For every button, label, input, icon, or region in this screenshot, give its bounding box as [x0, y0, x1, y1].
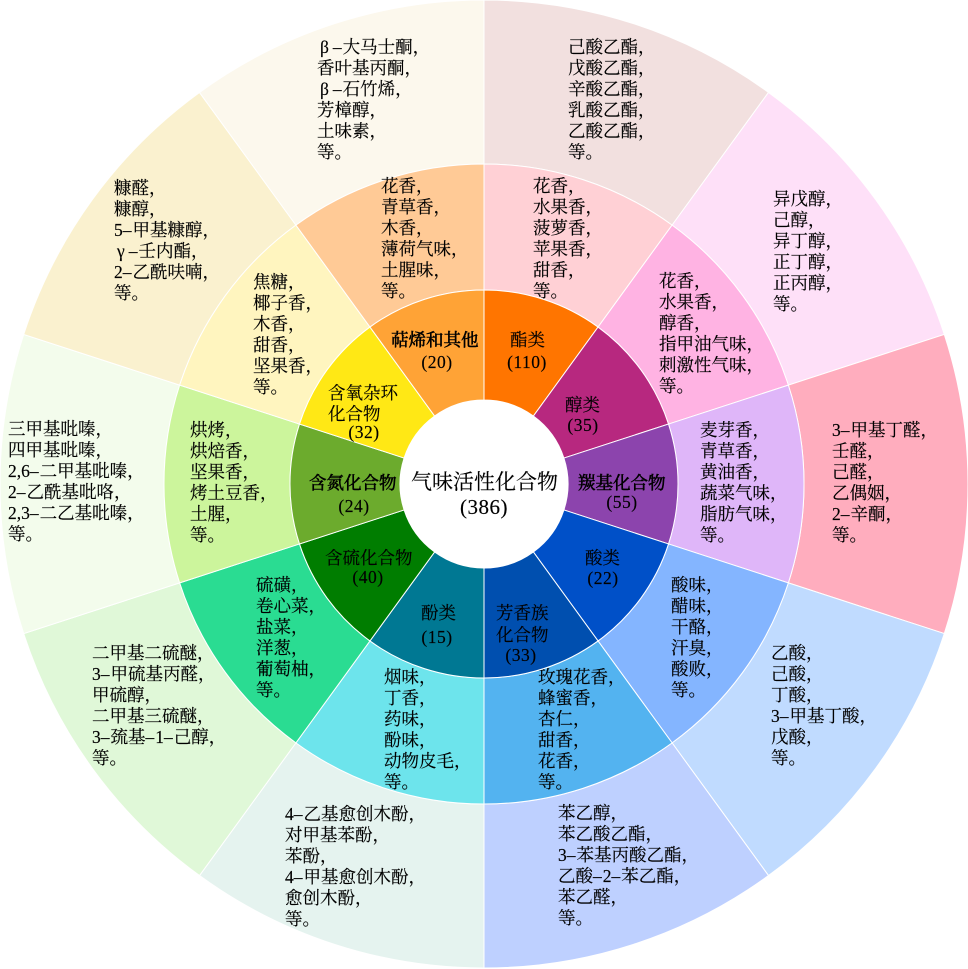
outer segment: nitrogen compounds: 等。 — [8, 524, 43, 544]
outer segment: sulfur compounds: 3–巯基–1–己醇， — [92, 727, 226, 747]
middle segment: terpenes and others: 木香， — [381, 218, 434, 238]
middle segment: phenols: 动物皮毛， — [384, 751, 472, 771]
outer segment: phenols: 苯酚， — [285, 846, 338, 866]
middle segment: oxygen heterocycles: 坚果香， — [253, 356, 323, 376]
outer segment: terpenes and others: β–石竹烯， — [320, 79, 413, 99]
middle segment: oxygen heterocycles: 木香， — [253, 314, 306, 334]
outer segment: oxygen heterocycles: 等。 — [114, 283, 149, 303]
inner segment: oxygen heterocycles: 化合物 — [328, 404, 380, 424]
center circle with title: (386) — [460, 495, 508, 519]
inner segment: carbonyls — [564, 424, 678, 544]
outer segment: terpenes and others: 等。 — [317, 142, 352, 162]
outer segment: alcohols: 异戊醇， — [773, 189, 843, 209]
inner segment: nitrogen compounds: (24) — [338, 496, 370, 516]
middle segment: aromatics: 杏仁， — [538, 709, 590, 729]
middle segment: acids: 干酪， — [671, 617, 724, 637]
outer segment: oxygen heterocycles: 2–乙酰呋喃， — [114, 262, 220, 282]
middle segment: terpenes and others: 土腥味， — [381, 260, 451, 280]
outer segment: acids: 3–甲基丁酸， — [771, 706, 877, 726]
outer segment: alcohols: 正丁醇， — [773, 252, 843, 272]
inner segment: aromatics: (33) — [505, 645, 537, 665]
middle segment: esters: 甜香， — [533, 260, 586, 280]
inner segment: sulfur compounds: 含硫化合物 — [325, 548, 412, 568]
outer segment: acids: 乙酸， — [771, 643, 824, 663]
middle segment: sulfur compounds: 等。 — [256, 680, 291, 700]
middle segment: aromatics — [484, 641, 672, 804]
middle segment: oxygen heterocycles: 椰子香， — [253, 293, 323, 313]
inner segment: terpenes and others: (20) — [421, 352, 453, 372]
outer segment: aromatics: 乙酸–2–苯乙酯， — [558, 866, 691, 886]
inner segment: acids: 酸类 — [585, 548, 620, 568]
outer segment: sulfur compounds: 甲硫醇， — [92, 685, 162, 705]
middle segment: acids: 等。 — [671, 680, 706, 700]
inner segment: terpenes and others: 萜烯和其他 — [391, 330, 478, 350]
inner segment: nitrogen compounds — [290, 424, 404, 544]
outer segment: aromatics: 3–苯基丙酸乙酯， — [558, 845, 699, 865]
middle segment: alcohols — [598, 225, 788, 424]
outer segment: sulfur compounds: 等。 — [92, 748, 127, 768]
outer segment: carbonyls: 乙偶姻， — [832, 483, 902, 503]
inner segment: acids: (22) — [587, 568, 619, 588]
outer segment: aromatics: 苯乙酸乙酯， — [558, 824, 663, 844]
outer segment: acids — [672, 583, 944, 876]
middle segment: sulfur compounds: 洋葱， — [256, 638, 308, 658]
outer segment: carbonyls: 3–甲基丁醛， — [832, 420, 938, 440]
middle segment: esters: 苹果香， — [533, 239, 603, 259]
middle segment: terpenes and others: 等。 — [381, 281, 416, 301]
middle segment: nitrogen compounds — [164, 385, 299, 583]
outer segment: phenols — [200, 743, 484, 968]
middle segment: terpenes and others: 青草香， — [381, 197, 451, 217]
middle segment: oxygen heterocycles — [180, 225, 370, 424]
middle segment: acids — [598, 544, 788, 743]
outer segment: oxygen heterocycles: γ–壬内酯， — [117, 241, 208, 261]
outer segment: esters: 乳酸乙酯， — [568, 100, 656, 120]
outer segment: esters: 等。 — [568, 142, 603, 162]
middle segment: nitrogen compounds: 等。 — [190, 525, 225, 545]
outer segment: carbonyls: 2–辛酮， — [832, 504, 903, 524]
inner segment: oxygen heterocycles: 含氧杂环 — [328, 383, 398, 403]
center circle with title: 气味活性化合物 — [411, 470, 558, 494]
outer segment: alcohols: 己醇， — [773, 210, 826, 230]
center circle with title — [400, 400, 568, 568]
middle segment: phenols: 烟味， — [384, 667, 436, 687]
middle segment: sulfur compounds: 卷心菜， — [256, 596, 326, 616]
outer segment: phenols: 愈创木酚， — [285, 888, 372, 908]
outer segment: nitrogen compounds: 三甲基吡嗪， — [8, 419, 113, 439]
outer segment: oxygen heterocycles: 糠醇， — [114, 199, 166, 219]
outer segment: carbonyls: 等。 — [832, 525, 867, 545]
outer segment: sulfur compounds: 二甲基二硫醚， — [92, 643, 214, 663]
inner segment: terpenes and others — [370, 290, 484, 416]
inner segment: esters: 酯类 — [510, 330, 545, 350]
inner segment: alcohols — [533, 327, 669, 458]
inner segment: carbonyls: (55) — [606, 492, 638, 512]
middle segment: phenols: 药味， — [384, 709, 436, 729]
middle segment: alcohols: 水果香， — [659, 292, 729, 312]
inner segment: phenols — [370, 552, 484, 678]
middle segment: alcohols: 等。 — [659, 376, 694, 396]
inner segment: esters — [484, 290, 598, 416]
middle segment: esters: 水果香， — [533, 197, 603, 217]
middle segment: terpenes and others — [296, 164, 484, 327]
outer segment: nitrogen compounds — [0, 334, 180, 634]
middle segment: carbonyls: 等。 — [700, 525, 735, 545]
inner segment: sulfur compounds: (40) — [352, 567, 384, 587]
middle segment: aromatics: 等。 — [538, 772, 573, 792]
outer segment: esters: 辛酸乙酯， — [568, 79, 656, 99]
outer segment: terpenes and others: 芳樟醇， — [317, 100, 387, 120]
inner segment: alcohols: 醇类 — [565, 395, 600, 415]
outer segment: acids: 戊酸， — [771, 727, 824, 747]
middle segment: sulfur compounds — [180, 544, 370, 743]
outer segment: terpenes and others: 土味素， — [317, 121, 387, 141]
inner segment: nitrogen compounds: 含氮化合物 — [309, 473, 396, 493]
middle segment: nitrogen compounds: 坚果香， — [190, 462, 260, 482]
outer segment: nitrogen compounds: 四甲基吡嗪， — [8, 440, 113, 460]
middle segment: acids: 醋味， — [671, 596, 724, 616]
outer segment: esters: 戊酸乙酯， — [568, 58, 656, 78]
outer segment: aromatics: 苯乙醇， — [558, 803, 628, 823]
middle segment: acids: 酸败， — [671, 659, 724, 679]
outer segment: aromatics: 苯乙醛， — [558, 887, 628, 907]
middle segment: aromatics: 玫瑰花香， — [538, 667, 626, 687]
outer segment: sulfur compounds: 二甲基三硫醚， — [92, 706, 214, 726]
inner segment: esters: (110) — [507, 352, 547, 372]
inner segment: oxygen heterocycles — [299, 327, 435, 458]
inner segment: sulfur compounds — [299, 510, 435, 641]
outer segment: acids: 丁酸， — [771, 685, 824, 705]
outer segment: alcohols: 正丙醇， — [773, 273, 843, 293]
outer segment: aromatics — [484, 743, 768, 968]
middle segment: sulfur compounds: 葡萄柚， — [256, 659, 326, 679]
middle segment: carbonyls: 麦芽香， — [700, 420, 770, 440]
middle segment: carbonyls: 脂肪气味， — [700, 504, 788, 524]
middle segment: sulfur compounds: 硫磺， — [256, 575, 308, 595]
inner segment: oxygen heterocycles: (32) — [348, 422, 380, 442]
outer segment: carbonyls: 壬醛， — [832, 441, 884, 461]
outer segment: acids: 等。 — [771, 748, 806, 768]
middle segment: oxygen heterocycles: 甜香， — [253, 335, 306, 355]
middle segment: acids: 酸味， — [671, 575, 724, 595]
outer segment: carbonyls — [788, 334, 968, 634]
outer segment: terpenes and others — [200, 0, 484, 225]
outer segment: terpenes and others: 香叶基丙酮， — [317, 58, 422, 78]
inner segment: phenols: 酚类 — [421, 603, 456, 623]
middle segment: carbonyls: 黄油香， — [700, 462, 770, 482]
middle segment: aromatics: 花香， — [538, 751, 590, 771]
middle segment: esters: 菠萝香， — [533, 218, 603, 238]
middle segment: alcohols: 花香， — [659, 271, 712, 291]
outer segment: esters — [484, 0, 768, 225]
middle segment: aromatics: 蜂蜜香， — [538, 688, 608, 708]
middle segment: carbonyls: 青草香， — [700, 441, 770, 461]
middle segment: phenols: 等。 — [384, 772, 419, 792]
outer segment: terpenes and others: β–大马士酮， — [320, 37, 430, 57]
middle segment: aromatics: 甜香， — [538, 730, 590, 750]
middle ring: aroma descriptors — [164, 164, 804, 804]
middle segment: esters: 花香， — [533, 176, 586, 196]
middle segment: phenols: 丁香， — [384, 688, 436, 708]
middle segment: oxygen heterocycles: 焦糖， — [253, 272, 306, 292]
outer segment: alcohols: 异丁醇， — [773, 231, 843, 251]
middle segment: nitrogen compounds: 土腥， — [190, 504, 242, 524]
middle segment: alcohols: 醇香， — [659, 313, 712, 333]
outer segment: oxygen heterocycles: 糠醛， — [114, 178, 166, 198]
middle segment: phenols: 酚味， — [384, 730, 436, 750]
outer segment: oxygen heterocycles — [24, 92, 296, 385]
outer segment: phenols: 对甲基苯酚， — [285, 825, 390, 845]
inner segment: aromatics: 化合物 — [496, 625, 548, 645]
outer segment: aromatics: 等。 — [558, 908, 593, 928]
outer segment: esters: 乙酸乙酯， — [568, 121, 656, 141]
inner segment: aromatics — [484, 552, 598, 678]
middle segment: alcohols: 刺激性气味， — [659, 355, 764, 375]
middle segment: acids: 汗臭， — [671, 638, 724, 658]
inner ring: compound classes — [290, 290, 678, 678]
middle segment: terpenes and others: 花香， — [381, 176, 434, 196]
middle segment: esters — [484, 164, 672, 327]
outer segment: sulfur compounds: 3–甲硫基丙醛， — [92, 664, 216, 684]
outer segment: oxygen heterocycles: 5–甲基糠醇， — [114, 220, 220, 240]
middle segment: phenols — [296, 641, 484, 804]
outer segment: alcohols: 等。 — [773, 294, 808, 314]
inner segment: acids — [533, 510, 669, 641]
outer segment: phenols: 等。 — [285, 909, 320, 929]
middle segment: oxygen heterocycles: 等。 — [253, 377, 288, 397]
outer segment: nitrogen compounds: 2,3–二乙基吡嗪， — [8, 503, 145, 523]
outer segment: phenols: 4–甲基愈创木酚， — [285, 867, 426, 887]
middle segment: carbonyls — [669, 385, 804, 583]
middle segment: nitrogen compounds: 烘烤， — [190, 420, 242, 440]
inner segment: alcohols: (35) — [567, 415, 599, 435]
outer segment: sulfur compounds — [24, 583, 296, 876]
inner segment: carbonyls: 羰基化合物 — [578, 473, 666, 493]
middle segment: terpenes and others: 薄荷气味， — [381, 239, 468, 259]
outer segment: nitrogen compounds: 2,6–二甲基吡嗪， — [8, 461, 145, 481]
outer segment: phenols: 4–乙基愈创木酚， — [285, 804, 426, 824]
outer segment: alcohols — [672, 92, 944, 385]
middle segment: nitrogen compounds: 烘焙香， — [190, 441, 260, 461]
outer segment: carbonyls: 己醛， — [832, 462, 884, 482]
inner segment: phenols: (15) — [421, 627, 453, 647]
outer segment: acids: 己酸， — [771, 664, 824, 684]
middle segment: carbonyls: 蔬菜气味， — [700, 483, 788, 503]
inner segment: aromatics: 芳香族 — [496, 603, 549, 623]
middle segment: nitrogen compounds: 烤土豆香， — [190, 483, 278, 503]
outer segment: nitrogen compounds: 2–乙酰基吡咯， — [8, 482, 132, 502]
middle segment: esters: 等。 — [533, 281, 568, 301]
outer segment: esters: 己酸乙酯， — [568, 37, 656, 57]
middle segment: alcohols: 指甲油气味， — [659, 334, 764, 354]
middle segment: sulfur compounds: 盐菜， — [256, 617, 308, 637]
